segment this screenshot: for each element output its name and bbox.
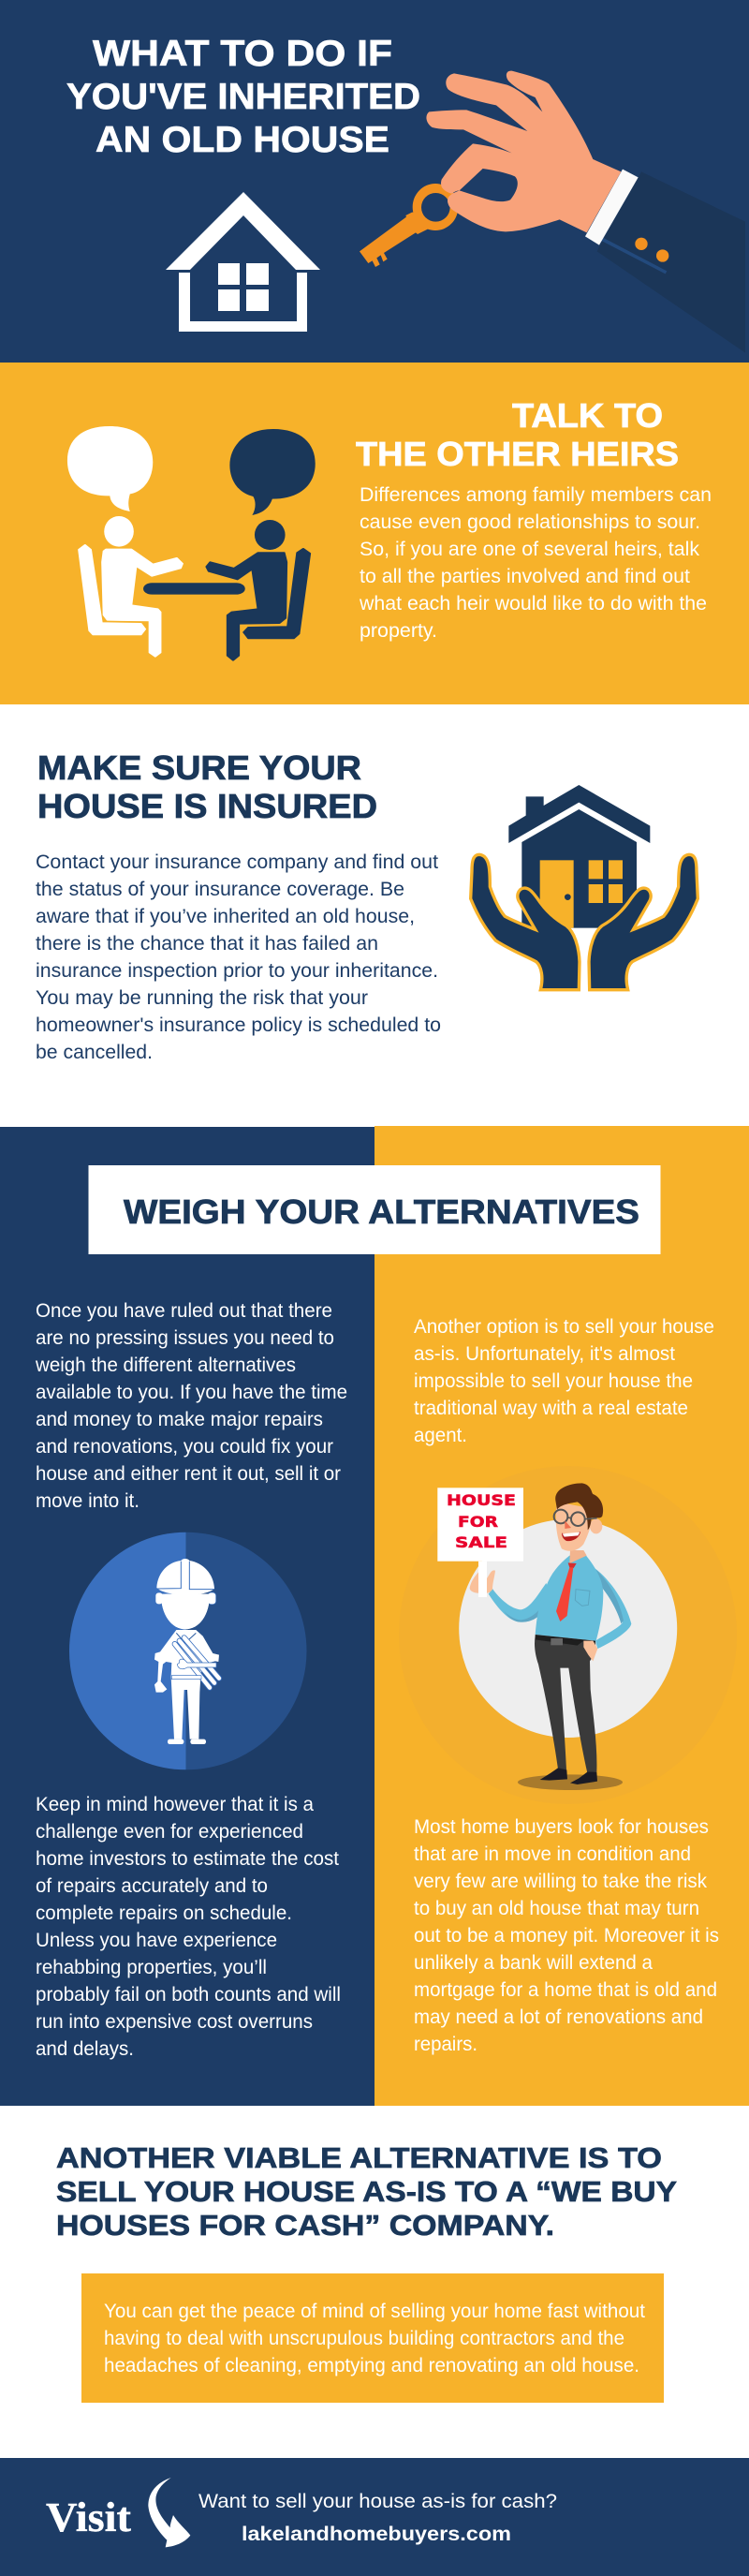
text block: left column challenge: rehabbing properties, you’ll: [36, 1956, 267, 1978]
text block: left column intro: are no pressing issues you need to: [36, 1326, 334, 1349]
heading: talk to the other heirs: [356, 396, 679, 473]
text block: contact your insurance company: insurance inspection prior to your inheritance.: [36, 959, 438, 982]
panel: footer: [0, 2458, 749, 2576]
text block: right column home buyers: that are in move in condition and: [414, 1843, 691, 1865]
text block: contact your insurance company: be cancelled.: [36, 1041, 153, 1063]
text block: left column intro: move into it.: [36, 1489, 140, 1512]
title: WHAT TO DO IF: [93, 34, 392, 74]
heading: sell to a we buy houses for cash company: HOUSES FOR CASH” COMPANY.: [56, 2210, 554, 2242]
text block: left column intro: house and either rent it out, sell it or: [36, 1462, 341, 1485]
text block: left column challenge: Unless you have experience: [36, 1929, 277, 1951]
figure: worker: [154, 1559, 219, 1744]
icon: hand holding key: [360, 71, 745, 353]
arrow: curved pointing down: [148, 2478, 190, 2547]
title: AN OLD HOUSE: [95, 120, 389, 160]
visit label: Visit: [46, 2495, 131, 2540]
heading: make sure your house is insured: MAKE SURE YOUR: [37, 748, 361, 787]
text block: right column intro: impossible to sell your house the: [414, 1369, 693, 1392]
text block: left column intro: available to you. If you have the time: [36, 1381, 347, 1403]
callout: peace of mind: You can get the peace of mind of selling your home fast without: [104, 2300, 645, 2322]
illustration: construction worker in circle: [69, 1532, 307, 1769]
title: YOU'VE INHERITED: [66, 77, 420, 117]
text block: right column intro: traditional way with a real estate: [414, 1397, 688, 1419]
text block: right column home buyers: very few are willing to take the risk: [414, 1870, 707, 1892]
text block: differences among family members: So, if you are one of several heirs, talk: [360, 538, 699, 560]
icon: hands holding a house: [471, 785, 698, 990]
text block: left column challenge: complete repairs on schedule.: [36, 1902, 292, 1924]
text block: left column challenge: probably fail on both counts and will: [36, 1983, 341, 2006]
icon: two people talking at a table: [67, 426, 316, 660]
text block: right column home buyers: Most home buyers look for houses: [414, 1815, 709, 1838]
text block: contact your insurance company: [36, 851, 441, 1063]
heading: make sure your house is insured: [37, 748, 377, 825]
text block: left column challenge: and delays.: [36, 2037, 134, 2060]
text block: differences among family members: to all the parties involved and find out: [360, 565, 690, 587]
heading: sell to a we buy houses for cash company: [56, 2142, 677, 2242]
panel: make sure your house is insured: [0, 704, 749, 1127]
text block: left column challenge: run into expensive cost overruns: [36, 2010, 313, 2033]
heading: talk to the other heirs: THE OTHER HEIRS: [356, 435, 679, 473]
text block: right column home buyers: [414, 1815, 719, 2055]
heading box: weigh your alternatives: [88, 1165, 661, 1254]
text block: differences among family members: cause even good relationships to sour.: [360, 511, 700, 533]
text block: differences among family members: property.: [360, 619, 437, 642]
figure: man: [470, 1483, 631, 1790]
icon: white house: [166, 192, 320, 332]
sign: house for sale: FOR: [458, 1513, 498, 1531]
text block: right column home buyers: out to be a money pit. Moreover it is: [414, 1924, 719, 1947]
text block: left column challenge: of repairs accurately and to: [36, 1874, 268, 1897]
text block: left column intro: and money to make major repairs: [36, 1408, 323, 1430]
text block: differences among family members: what each heir would like to do with the: [359, 592, 707, 614]
panel: weigh your alternatives: [0, 1126, 749, 2106]
text block: contact your insurance company: Contact your insurance company and find out: [36, 851, 438, 873]
text block: left column intro: Once you have ruled out that there: [36, 1299, 332, 1322]
text block: left column challenge: [36, 1793, 341, 2060]
text block: right column home buyers: unlikely a bank will extend a: [414, 1951, 653, 1974]
text block: left column intro: and renovations, you could fix your: [36, 1435, 333, 1458]
text block: right column intro: [414, 1315, 714, 1446]
text block: left column intro: [35, 1299, 347, 1512]
callout: peace of mind: having to deal with unscrupulous building contractors and the: [104, 2327, 624, 2349]
call to action text: [198, 2490, 557, 2545]
panel: talk to the other heirs: [0, 363, 749, 704]
call to action text: lakelandhomebuyers.com: [242, 2523, 511, 2545]
text block: right column home buyers: to buy an old house that may turn: [414, 1897, 699, 1919]
text block: right column intro: Another option is to sell your house: [414, 1315, 714, 1338]
panel: header: [0, 0, 749, 363]
panel: another viable alternative: [0, 2106, 749, 2458]
text block: differences among family members: Differences among family members can: [360, 483, 712, 506]
text block: contact your insurance company: aware that if you’ve inherited an old house,: [36, 905, 415, 927]
text block: contact your insurance company: the status of your insurance coverage. Be: [36, 878, 404, 900]
heading: talk to the other heirs: TALK TO: [512, 396, 663, 435]
heading: sell to a we buy houses for cash company: ANOTHER VIABLE ALTERNATIVE IS TO: [56, 2142, 662, 2174]
text block: right column intro: agent.: [414, 1424, 467, 1446]
text block: left column challenge: Keep in mind however that it is a: [36, 1793, 314, 1815]
text block: right column home buyers: repairs.: [414, 2033, 477, 2055]
callout: peace of mind: [81, 2273, 664, 2403]
sign: house for sale: SALE: [455, 1533, 507, 1551]
text block: contact your insurance company: there is the chance that it has failed an: [36, 932, 378, 955]
illustration: man holding house for sale sign: [399, 1466, 737, 1804]
heading: sell to a we buy houses for cash company: SELL YOUR HOUSE AS-IS TO A “WE BUY: [56, 2176, 677, 2208]
text block: contact your insurance company: You may be running the risk that your: [36, 986, 368, 1009]
call to action text: Want to sell your house as-is for cash?: [198, 2490, 557, 2512]
sign: house for sale: [437, 1488, 523, 1562]
text block: differences among family members: [359, 483, 712, 642]
text block: left column challenge: challenge even for experienced: [36, 1820, 303, 1843]
text block: left column challenge: home investors to estimate the cost: [36, 1847, 339, 1870]
text block: right column intro: as-is. Unfortunately, it's almost: [414, 1342, 675, 1365]
title: [66, 34, 420, 160]
heading box: weigh your alternatives: WEIGH YOUR ALTERNATIVES: [124, 1192, 639, 1231]
callout: peace of mind: headaches of cleaning, emptying and renovating an old house.: [104, 2354, 639, 2376]
text block: contact your insurance company: homeowner's insurance policy is scheduled to: [36, 1014, 441, 1036]
text block: left column intro: weigh the different alternatives: [35, 1354, 296, 1376]
text block: right column home buyers: may need a lot of renovations and: [414, 2006, 703, 2028]
heading: make sure your house is insured: HOUSE IS INSURED: [37, 787, 377, 825]
text block: right column home buyers: mortgage for a home that is old and: [414, 1978, 717, 2001]
sign: house for sale: HOUSE: [447, 1491, 516, 1509]
